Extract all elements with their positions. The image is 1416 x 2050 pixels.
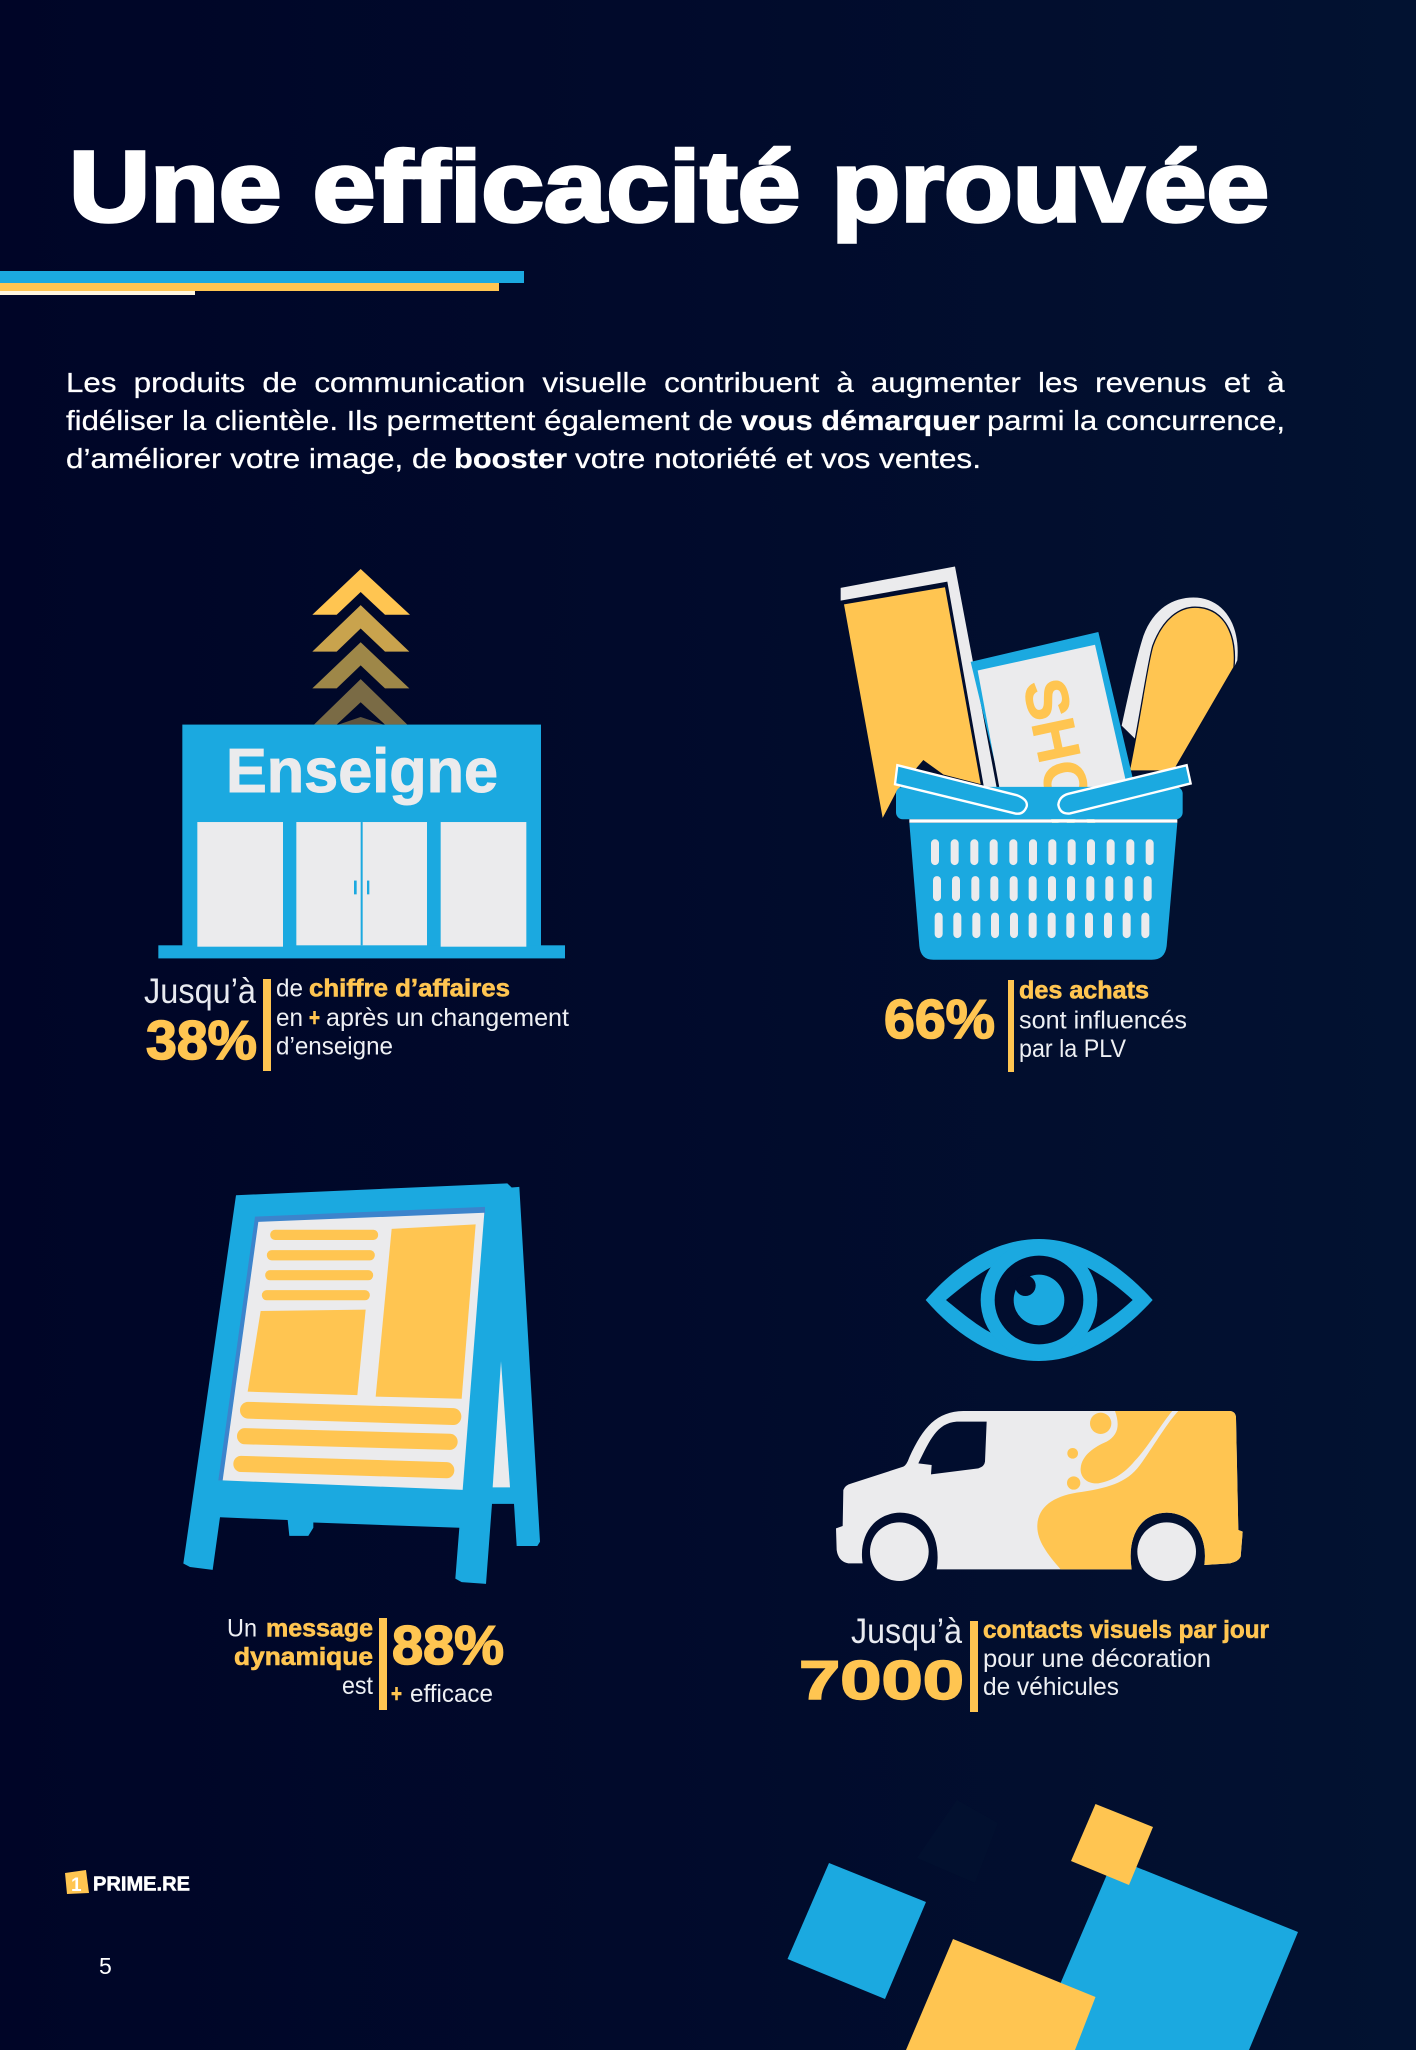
stat: 7000: pour une décoration bbox=[983, 1645, 1211, 1673]
stat: 38%: Jusqu’à bbox=[144, 972, 256, 1011]
icon: basket with displays: SHOP bbox=[1010, 673, 1111, 853]
store sign text: Enseigne bbox=[226, 737, 498, 806]
stat: 66%: des achats bbox=[1019, 976, 1149, 1004]
panel: enseigne bbox=[144, 569, 569, 1071]
stat: 88% bbox=[227, 1614, 504, 1710]
icon: upward chevrons bbox=[312, 569, 410, 725]
stat: 66%: par la PLV bbox=[1019, 1035, 1126, 1063]
intro paragraph bbox=[66, 368, 1285, 474]
stat: 7000: 7000 bbox=[799, 1649, 964, 1711]
icon: van bbox=[836, 1411, 1243, 1581]
stat: 88%: 88% bbox=[392, 1614, 504, 1676]
intro paragraph: vous démarquer bbox=[741, 405, 980, 436]
icon: A-frame sign bbox=[183, 1183, 540, 1584]
stat: 38%: + bbox=[309, 1004, 320, 1032]
stat: 38% bbox=[144, 972, 569, 1071]
icon: basket with displays bbox=[841, 567, 1238, 960]
stat: 38%: 38% bbox=[146, 1009, 257, 1071]
intro paragraph: Les produits de communication visuelle contribuent à augmenter les revenus et à bbox=[66, 368, 1285, 399]
stat: 7000 bbox=[799, 1612, 1269, 1712]
icon: eye bbox=[926, 1239, 1153, 1361]
stat: 38%: d’enseigne bbox=[276, 1032, 393, 1060]
intro paragraph: votre notoriété et vos ventes. bbox=[575, 443, 981, 474]
stat: 88%: Un bbox=[227, 1614, 257, 1642]
title underline bars bbox=[0, 271, 524, 295]
stat: 88%: est bbox=[342, 1672, 373, 1700]
icon: storefront bbox=[158, 725, 565, 958]
stat: 88%: dynamique bbox=[234, 1643, 373, 1671]
intro paragraph: fidéliser la clientèle. Ils permettent également de bbox=[66, 405, 733, 436]
logo: PRIME.RE bbox=[65, 1870, 190, 1896]
stat: 88%: message bbox=[266, 1614, 373, 1642]
stat: 38%: après un changement bbox=[326, 1004, 569, 1032]
panel: message dynamique bbox=[183, 1183, 540, 1710]
stat: 88%: efficace bbox=[410, 1680, 493, 1708]
stat: 88%: + bbox=[391, 1680, 402, 1708]
stat: 38%: en bbox=[276, 1004, 303, 1032]
logo: PRIME.RE: PRIME.RE bbox=[93, 1874, 190, 1896]
stat: 66% bbox=[884, 976, 1187, 1072]
stat: 7000: Jusqu’à bbox=[851, 1612, 962, 1651]
title: Une efficacité prouvée bbox=[69, 131, 1269, 243]
intro paragraph: parmi la concurrence, bbox=[987, 405, 1285, 436]
decorative squares bbox=[788, 1800, 1298, 2050]
panel: vehicle decoration bbox=[799, 1239, 1269, 1712]
stat: 7000: de véhicules bbox=[983, 1673, 1119, 1701]
logo: PRIME.RE: 1 bbox=[71, 1875, 82, 1896]
panel: PLV basket bbox=[841, 567, 1238, 1072]
stat: 66%: sont influencés bbox=[1019, 1006, 1187, 1034]
intro paragraph: booster bbox=[454, 443, 567, 474]
stat: 38%: chiffre d’affaires bbox=[309, 974, 510, 1002]
intro paragraph: d’améliorer votre image, de bbox=[66, 443, 447, 474]
stat: 66%: 66% bbox=[884, 988, 995, 1050]
page number: 5 bbox=[99, 1953, 112, 1979]
stat: 38%: de bbox=[276, 974, 303, 1002]
stat: 7000: contacts visuels par jour bbox=[983, 1616, 1269, 1644]
